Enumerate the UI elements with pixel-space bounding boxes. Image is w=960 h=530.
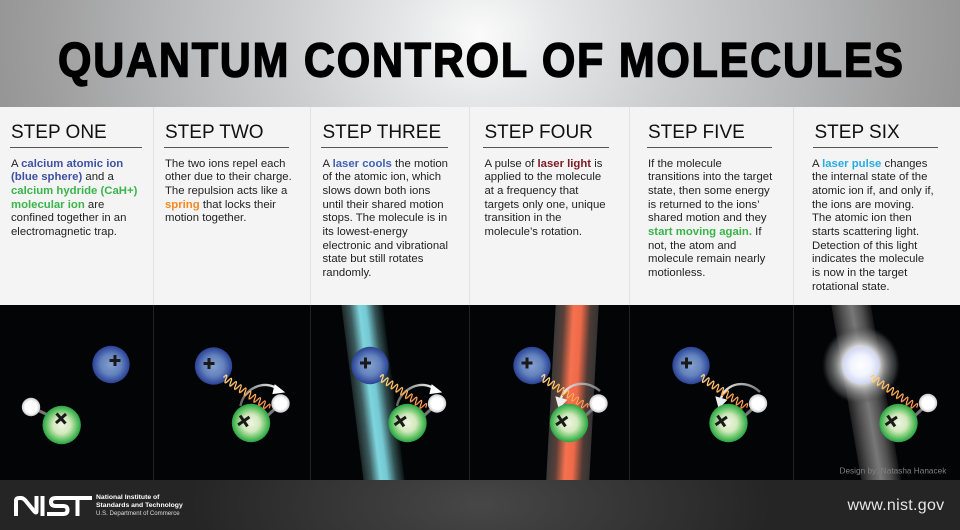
text: step two: The two ions repel each bbox=[165, 158, 285, 170]
website: www.nist.gov bbox=[848, 497, 944, 514]
NIST logo bbox=[14, 496, 92, 516]
bond bbox=[586, 408, 593, 416]
header banner bbox=[0, 0, 960, 107]
panel: step one bbox=[0, 107, 154, 305]
text: step six bbox=[812, 158, 934, 293]
text: step three: randomly. bbox=[322, 267, 371, 279]
text: step two: motion together. bbox=[165, 212, 246, 224]
agency name bbox=[96, 494, 183, 509]
text: step five bbox=[648, 158, 772, 279]
spring bbox=[378, 373, 428, 411]
designer credit: Design by: Natasha Hanacek bbox=[840, 466, 947, 476]
calcium ion bbox=[672, 347, 710, 384]
glowing calcium ion bbox=[842, 347, 880, 384]
bond bbox=[266, 406, 278, 417]
heading: step five: STEP FIVE bbox=[648, 122, 745, 143]
text: step three: of the atomic ion, which bbox=[322, 171, 441, 183]
text: step one: calcium hydride (CaH+) bbox=[11, 185, 137, 197]
hydrogen atom bbox=[749, 394, 767, 413]
panel: step five bbox=[630, 107, 794, 305]
text: step four: targets only one, unique bbox=[484, 199, 606, 211]
text: step one: confined together in an bbox=[11, 212, 126, 224]
rotation arrow bbox=[397, 385, 441, 406]
text: step four: at a frequency that bbox=[484, 185, 578, 197]
bond bbox=[915, 408, 923, 416]
heading: step three: STEP THREE bbox=[322, 122, 441, 143]
hydrogen atom bbox=[271, 394, 290, 413]
heading: step six: STEP SIX bbox=[814, 122, 900, 143]
text: step two: spring that locks their bbox=[165, 199, 276, 211]
heading: step two: STEP TWO bbox=[165, 122, 264, 143]
hydrogen atom bbox=[919, 394, 937, 412]
hydrogen atom bbox=[428, 394, 446, 413]
calcium hydride ion bbox=[550, 404, 588, 442]
calcium hydride ion bbox=[879, 404, 918, 442]
text: step four: A pulse of laser light is bbox=[484, 158, 602, 170]
calcium ion bbox=[195, 347, 232, 385]
bond bbox=[424, 408, 432, 416]
text: step two: other due to their charge. bbox=[165, 171, 292, 183]
scene: step five bbox=[672, 347, 767, 442]
text: step three: until their shared motion bbox=[322, 199, 444, 211]
scene: step one bbox=[22, 346, 130, 444]
text: step one: A calcium atomic ion bbox=[11, 158, 123, 170]
text: step two bbox=[165, 158, 292, 224]
calcium hydride ion bbox=[42, 406, 81, 444]
detection laser beam bbox=[832, 305, 901, 480]
rotation arrow bbox=[240, 385, 284, 406]
panel: step four bbox=[470, 107, 630, 305]
text: step two: The repulsion acts like a bbox=[165, 185, 287, 197]
rotation arrow bbox=[556, 384, 600, 408]
text: step six: the internal state of the bbox=[812, 171, 927, 183]
scene: step four bbox=[513, 305, 608, 480]
cooling laser beam bbox=[342, 305, 404, 480]
text: step five: state, then some energy bbox=[648, 185, 770, 197]
illustration strip: six trap scenes bbox=[0, 305, 960, 480]
text: step one: (blue sphere) and a bbox=[11, 171, 114, 183]
hydrogen atom bbox=[589, 394, 608, 413]
molecule bond bbox=[33, 408, 48, 415]
rotation arrow bbox=[716, 384, 760, 408]
text: step four: applied to the molecule bbox=[484, 171, 601, 183]
panel: step two bbox=[154, 107, 311, 305]
text: step one: molecular ion are bbox=[11, 199, 104, 211]
text: step six: starts scattering light. bbox=[812, 226, 919, 238]
text: step three: A laser cools the motion bbox=[322, 158, 448, 170]
department line: U.S. Department of Commerce bbox=[96, 510, 180, 517]
text: step three: its lowest-energy bbox=[322, 226, 408, 238]
hydrogen atom bbox=[22, 398, 40, 416]
text: step six: atomic ion if, and only if, bbox=[812, 185, 934, 197]
text: step three: electronic and vibrational bbox=[322, 240, 448, 252]
text: step six: indicates the molecule bbox=[812, 253, 924, 265]
text: step one bbox=[11, 158, 137, 238]
text: step five: is returned to the ions’ bbox=[648, 199, 760, 211]
agency name: National Institute of bbox=[96, 494, 159, 501]
calcium ion bbox=[92, 346, 130, 383]
text: step four bbox=[484, 158, 606, 238]
text: step six: The atomic ion then bbox=[812, 212, 912, 224]
agency name: Standards and Technology bbox=[96, 502, 183, 509]
rotational laser beam bbox=[546, 305, 599, 480]
scene: step two bbox=[195, 347, 290, 442]
text: step five: start moving again. If bbox=[648, 226, 761, 238]
calcium ion bbox=[351, 347, 389, 384]
text: step five: motionless. bbox=[648, 267, 705, 279]
scene: step six bbox=[823, 305, 946, 480]
spring bbox=[221, 374, 271, 411]
spring bbox=[699, 373, 749, 411]
scene: step three bbox=[342, 305, 446, 480]
panel: step three bbox=[311, 107, 470, 305]
calcium hydride ion bbox=[709, 404, 748, 442]
text: step five: shared motion and they bbox=[648, 212, 767, 224]
text: step six: the ions are moving. bbox=[812, 199, 914, 211]
scattered light glow bbox=[823, 329, 899, 400]
text: step three: stops. The molecule is in bbox=[322, 212, 447, 224]
text: step three bbox=[322, 158, 448, 279]
spring bbox=[869, 373, 919, 411]
text: step one: electromagnetic trap. bbox=[11, 226, 117, 238]
text: step four: transition in the bbox=[484, 212, 561, 224]
text: step six: Detection of this light bbox=[812, 240, 917, 252]
text: step six: is now in the target bbox=[812, 267, 907, 279]
panel: step six bbox=[794, 107, 960, 305]
text: step five: transitions into the target bbox=[648, 171, 772, 183]
text: step six: rotational state. bbox=[812, 281, 890, 293]
text: step three: slows down both ions bbox=[322, 185, 430, 197]
heading: step four: STEP FOUR bbox=[484, 122, 593, 143]
text: step six: A laser pulse changes bbox=[812, 158, 927, 170]
calcium ion bbox=[513, 347, 551, 384]
spring bbox=[539, 373, 589, 411]
heading: step one: STEP ONE bbox=[11, 122, 107, 143]
text: step five: molecule remain nearly bbox=[648, 253, 765, 265]
title: QUANTUM CONTROL OF MOLECULES bbox=[58, 32, 903, 87]
bond bbox=[744, 406, 756, 417]
calcium hydride ion bbox=[232, 404, 270, 442]
text: step five: not, the atom and bbox=[648, 240, 736, 252]
text: step three: state but still rotates bbox=[322, 253, 423, 265]
calcium hydride ion bbox=[388, 404, 427, 442]
text: step four: molecule’s rotation. bbox=[484, 226, 582, 238]
footer bar bbox=[0, 480, 960, 530]
text: step five: If the molecule bbox=[648, 158, 722, 170]
